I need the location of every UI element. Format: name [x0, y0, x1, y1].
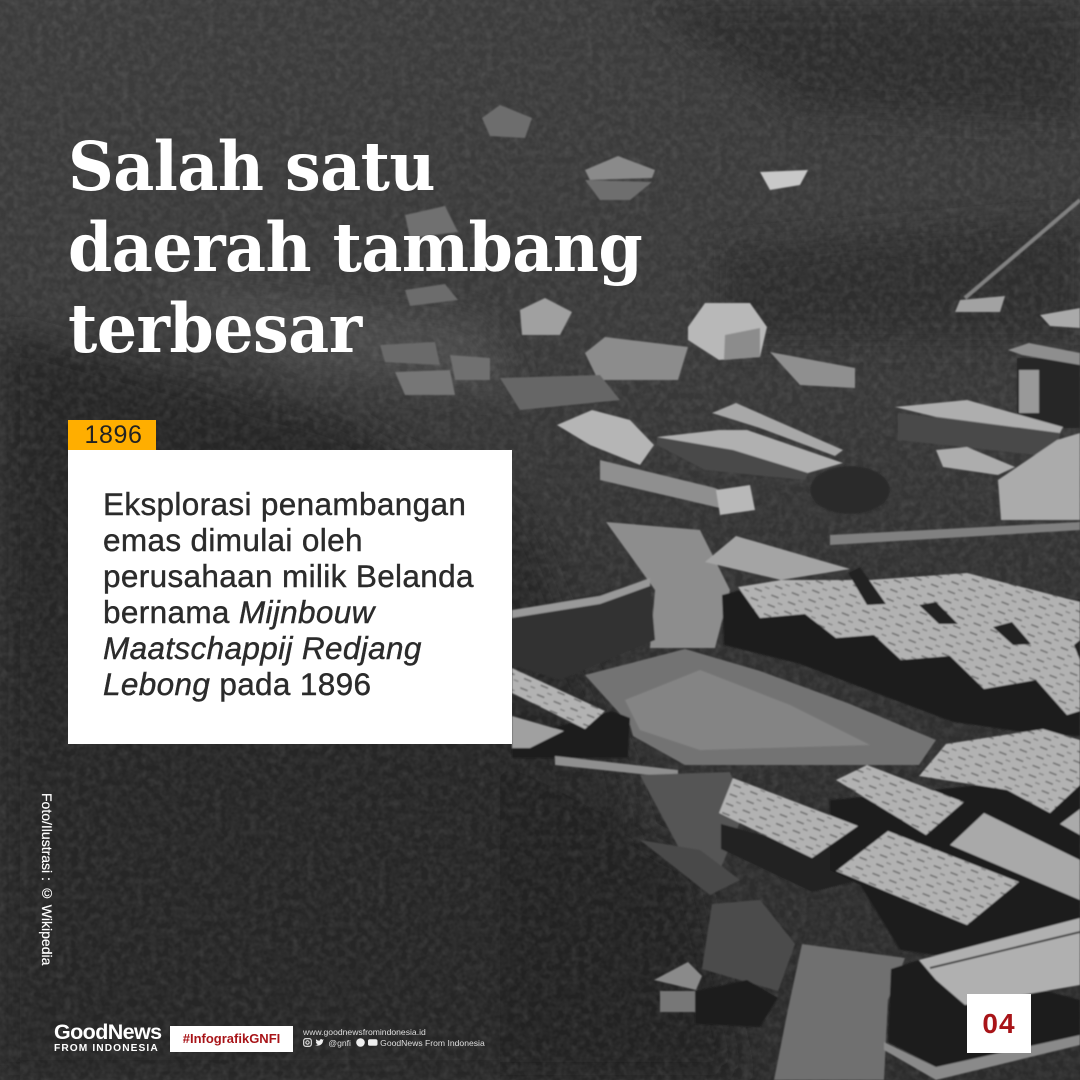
logo: GoodNews From Indonesia: GoodNews: [54, 1020, 162, 1044]
social links: @gnfi GoodNews From Indonesia: [328, 1038, 485, 1048]
lower roofs: [640, 772, 745, 870]
text card: [68, 450, 512, 744]
title: terbesar: [68, 289, 362, 368]
hashtag label: [170, 1026, 293, 1052]
page number: 04: [982, 1008, 1016, 1039]
hashtag label: #InfografikGNFI: [183, 1031, 280, 1046]
bottom right building: [888, 958, 1080, 1067]
body text: bernama Mijnbouw: [103, 594, 375, 630]
body text: emas dimulai oleh: [103, 522, 363, 558]
year tag: [68, 420, 156, 450]
page number: [967, 994, 1031, 1053]
long roofs and dark walls: [705, 536, 850, 580]
body text: Lebong pada 1896: [103, 666, 371, 702]
year tag: 1896: [84, 421, 142, 449]
small house bottom center: [702, 900, 795, 991]
social links: [303, 1027, 485, 1048]
left shed: [512, 711, 630, 758]
body text: perusahaan milik Belanda: [103, 558, 474, 594]
central ground and road: [606, 522, 730, 648]
logo: GoodNews From Indonesia: FROM INDONESIA: [54, 1043, 159, 1054]
verandah buildings: [898, 413, 1060, 457]
body text: Eksplorasi penambangan: [103, 486, 466, 522]
title: daerah tambang: [68, 208, 642, 287]
body text: [103, 486, 474, 702]
upper village buildings: [482, 105, 532, 138]
photo credit: Foto/Ilustrasi : © Wikipedia: [39, 793, 55, 965]
title: Salah satu: [68, 127, 435, 206]
social links: www.goodnewsfromindonesia.id: [303, 1027, 426, 1037]
tower building: [1017, 358, 1080, 428]
body text: Maatschappij Redjang: [103, 630, 422, 666]
title: [68, 127, 642, 368]
